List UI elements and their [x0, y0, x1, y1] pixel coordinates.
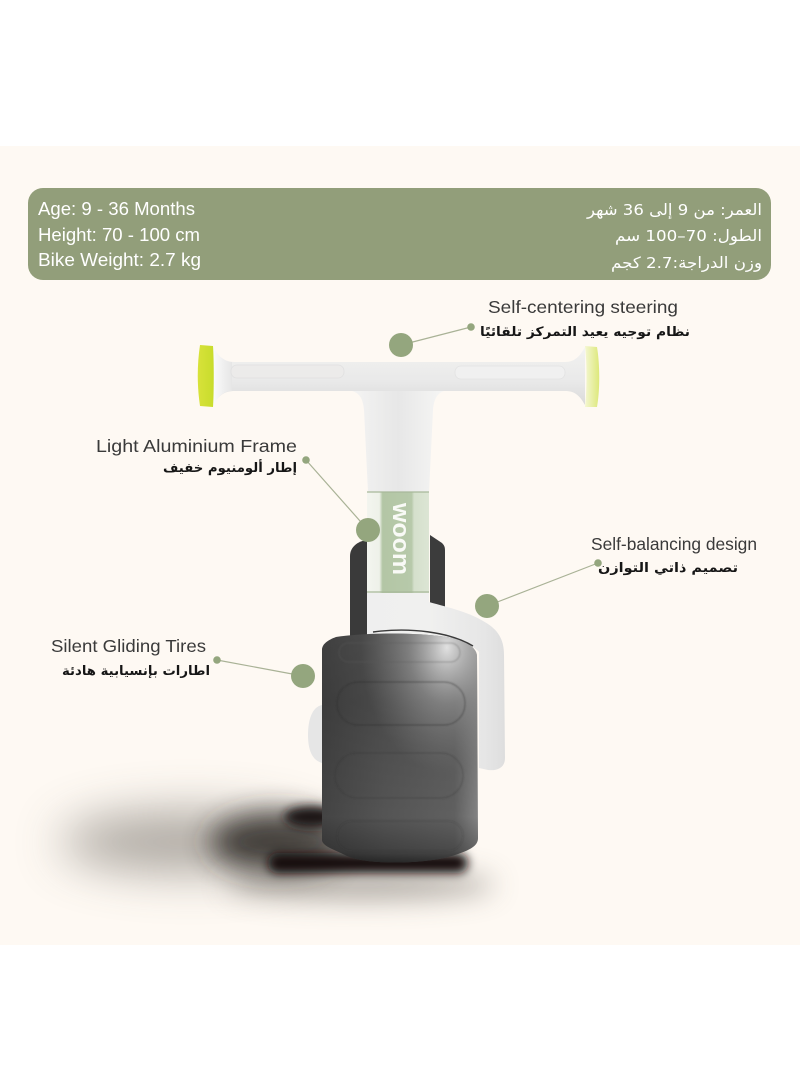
tire treads: [335, 643, 465, 851]
callout: light aluminium frame: إطار ألومنيوم خفيف: [163, 459, 297, 476]
specs in English: Age: 9 - 36 Months: [38, 198, 195, 219]
specifications panel: [28, 188, 771, 280]
specs in English: Bike Weight: 2.7 kg: [38, 249, 201, 270]
wheel: [322, 634, 478, 863]
callout: self-balancing design: تصميم ذاتي التوازن: [598, 561, 738, 576]
callout: self-centering steering: [389, 297, 690, 357]
specs in Arabic: وزن الدراجة:2.7 كجم: [611, 254, 762, 273]
green frame band: [367, 492, 429, 593]
callout: light aluminium frame: [96, 436, 380, 542]
callout: self-centering steering: Self-centering steering: [488, 297, 678, 317]
right grip cap: [585, 346, 599, 407]
ground shadow: [60, 806, 495, 899]
woom logo: woom: [387, 502, 414, 575]
rear plates: [350, 535, 445, 645]
stem: [352, 391, 444, 492]
specs in English: [38, 198, 201, 270]
cream background panel: [0, 146, 800, 945]
fork and lower frame: [367, 590, 505, 770]
callout: self-balancing design: Self-balancing design: [591, 534, 757, 554]
wheel arch shadow line: [373, 630, 473, 646]
specs in Arabic: الطول: 70–100 سم: [615, 227, 762, 245]
specs in English: Height: 70 - 100 cm: [38, 224, 200, 245]
specs in Arabic: العمر: من 9 إلى 36 شهر: [586, 201, 762, 220]
callout: silent gliding tires: اطارات بإنسيابية هادئة: [62, 664, 210, 679]
callout: self-centering steering: نظام توجيه يعيد التمركز تلقائيًا: [480, 325, 690, 340]
callout: self-balancing design: [475, 534, 757, 618]
left grip cap: [198, 345, 214, 407]
handlebar: [198, 345, 599, 407]
callout: silent gliding tires: [51, 636, 315, 688]
bike illustration: [198, 345, 599, 863]
callout: light aluminium frame: Light Aluminium Frame: [96, 436, 297, 456]
left hub: [308, 705, 322, 763]
specs in Arabic: [586, 201, 762, 273]
callout: silent gliding tires: Silent Gliding Tires: [51, 636, 206, 656]
